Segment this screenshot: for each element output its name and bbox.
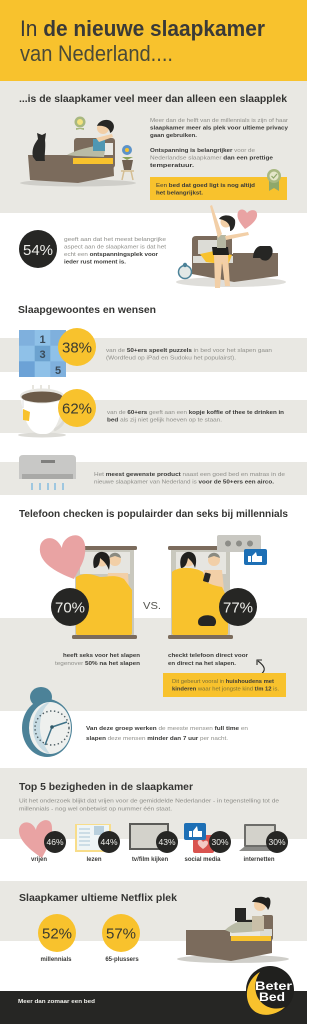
icon: rosette check [267, 169, 281, 191]
illustration: couple in bed, telefoon [168, 546, 233, 639]
text block: privacy: temperatuur. [150, 163, 195, 169]
item: social media: social media [184, 857, 221, 863]
text: puzzels: (Wordfeud op iPad en Sudoku het populairst). [106, 356, 236, 362]
item: vrijen: 46% [46, 837, 64, 847]
icon: puzzle: 5 [55, 365, 61, 377]
footer bar: Meer dan zomaar een bed [18, 999, 95, 1005]
heading: netflix: Slaapkamer ultieme Netflix plek [19, 893, 177, 904]
item: vrijen [19, 820, 66, 863]
illustration: woman stretching by bed [176, 205, 286, 288]
heading: top 5: Top 5 bezigheden in de slaapkamer [19, 782, 193, 793]
title banner: In de nieuwe slaapkamer [20, 16, 265, 41]
text: top 5 intro [19, 798, 279, 812]
icon: airco [19, 455, 76, 490]
icon: heart [40, 535, 85, 579]
text block: 54%: aspect aan de slaapkamer is dat het [64, 244, 167, 250]
text block: 54% [64, 237, 167, 266]
title banner: van Nederland.... [20, 41, 173, 66]
stat: 77%: 77% [223, 600, 253, 616]
text: airco: nieuwe slaapkamer van Nederland is voor de 50+ers een airco. [94, 480, 275, 486]
illustration: couple in bed, seks [72, 546, 137, 639]
text: seks: heeft seks voor het slapen [63, 653, 140, 659]
callout: huishoudens: Dit gebeurt vooral in huishoudens met [172, 679, 274, 685]
item: lezen: lezen [86, 857, 102, 863]
illustration: woman relaxing on bed with cat [20, 116, 136, 186]
stat: 57% 65-plussers [102, 914, 140, 963]
item: lezen [75, 824, 120, 863]
item: tv/film kijken: 43% [158, 837, 176, 847]
text block: privacy: Ontspanning is belangrijker voor de [150, 148, 255, 154]
text: koffie: bed als zij niet gelijk hoeven op te staan. [107, 418, 222, 424]
stat: 54% [19, 230, 57, 268]
item: vrijen: vrijen [31, 857, 47, 863]
stat: 57% 65-plussers: 57% [106, 926, 136, 942]
text block: privacy [150, 118, 288, 169]
text: telefoon [168, 653, 248, 667]
text block: 54%: ieder rust moment is. [64, 260, 127, 266]
icon: puzzle [19, 330, 66, 377]
text: top 5 intro: millennials - nog wel onbetwist op nummer één staat. [19, 806, 172, 812]
heading: slaapgewoontes: Slaapgewoontes en wensen [18, 305, 156, 316]
item: tv/film kijken: tv/film kijken [132, 857, 169, 863]
stat: 77% [219, 588, 257, 626]
text: full time: Van deze groep werken de meeste mensen full time en [86, 726, 248, 732]
text block: 54%: echt een ontspanningsplek voor [64, 252, 158, 258]
icon: puzzle: 1 [39, 334, 46, 346]
text block: privacy: slaapkamer meer als plek voor ultieme privacy [150, 126, 288, 132]
icon: puzzle: 3 [39, 349, 46, 361]
plant [121, 145, 134, 180]
item: lezen: 44% [100, 837, 118, 847]
text block: privacy: Meer dan de helft van de millennials is zijn of haar [150, 118, 288, 124]
callout: bed dat goed ligt: Een bed dat goed ligt is nog altijd [156, 183, 255, 189]
text block: privacy: gaan gebruiken. [150, 133, 198, 139]
label: vs: VS. [143, 601, 161, 612]
title banner [0, 0, 307, 81]
stat: 38%: 38% [62, 340, 92, 356]
text: seks [55, 653, 140, 667]
stat: 70%: 70% [55, 600, 85, 616]
text: airco [94, 472, 285, 486]
heading: meer dan een slaapplek: ...is de slaapkamer veel meer dan alleen een slaapplek [19, 94, 287, 105]
text: koffie [107, 410, 284, 424]
logo: Beter Bed: Bed [259, 992, 285, 1004]
item: social media: 30% [211, 837, 229, 847]
logo: Beter Bed: Beter [255, 981, 293, 993]
stat: 70% [51, 588, 89, 626]
icon: chat bubble [217, 535, 261, 552]
text: seks: tegenover 50% na het slapen [55, 661, 140, 667]
text: full time: slapen deze mensen minder dan 7 uur per nacht. [86, 736, 228, 742]
stat: 52% millennials: millennials [40, 957, 72, 963]
stat: 52% millennials [38, 914, 76, 963]
text: airco: Het meest gewenste product naast een goed bed en matras in de [94, 472, 285, 478]
illustration: woman with laptop on bed [177, 897, 289, 963]
stat: 62%: 62% [62, 400, 92, 418]
item: tv/film kijken [129, 823, 178, 863]
text: top 5 intro: Uit het onderzoek blijkt dat vrijen voor de gemiddelde Nederlander - in tegenstelling tot de [19, 798, 279, 804]
text: puzzels [106, 348, 272, 362]
text: puzzels: van de 50+ers speelt puzzels in bed voor het slapen gaan [106, 348, 272, 354]
icon: like [244, 549, 267, 565]
stat: 54%: 54% [23, 242, 53, 259]
heading: telefoon checken: Telefoon checken is populairder dan seks bij millennials [19, 509, 288, 520]
text: full time [86, 726, 248, 742]
stat: 57% 65-plussers: 65-plussers [105, 957, 139, 963]
item: social media [184, 823, 231, 863]
callout: huishoudens: kinderen waar het jongste kind t/m 12 is. [172, 686, 279, 692]
icon: cat on bed [253, 246, 273, 261]
icon: coffee cup [18, 385, 66, 438]
footer bar [0, 991, 307, 1024]
callout: bed dat goed ligt: het belangrijkst. [156, 190, 204, 196]
logo: Beter Bed [246, 966, 294, 1015]
stat: 38% [58, 328, 96, 366]
icon: alarm clock [22, 687, 72, 757]
callout: huishoudens [163, 673, 286, 697]
icon: heart [237, 209, 257, 229]
text: koffie: van de 60+ers geeft aan een kopje koffie of thee te drinken in [107, 410, 284, 416]
icon: alarm clock [178, 263, 192, 278]
item: internetten [239, 824, 288, 863]
callout: bed dat goed ligt [150, 169, 287, 200]
stat: 52% millennials: 52% [42, 926, 72, 942]
rosette [74, 116, 86, 130]
text: telefoon: en direct na het slapen. [168, 661, 237, 667]
text block: privacy: Nederlandse slaapkamer dan een prettige [150, 156, 273, 162]
arrow [257, 660, 264, 675]
item: internetten: internetten [243, 857, 275, 863]
text block: 54%: geeft aan dat het meest belangrijke [64, 237, 166, 243]
item: internetten: 30% [268, 837, 286, 847]
stat: 62% [58, 389, 96, 427]
text: telefoon: checkt telefoon direct voor [168, 653, 248, 659]
